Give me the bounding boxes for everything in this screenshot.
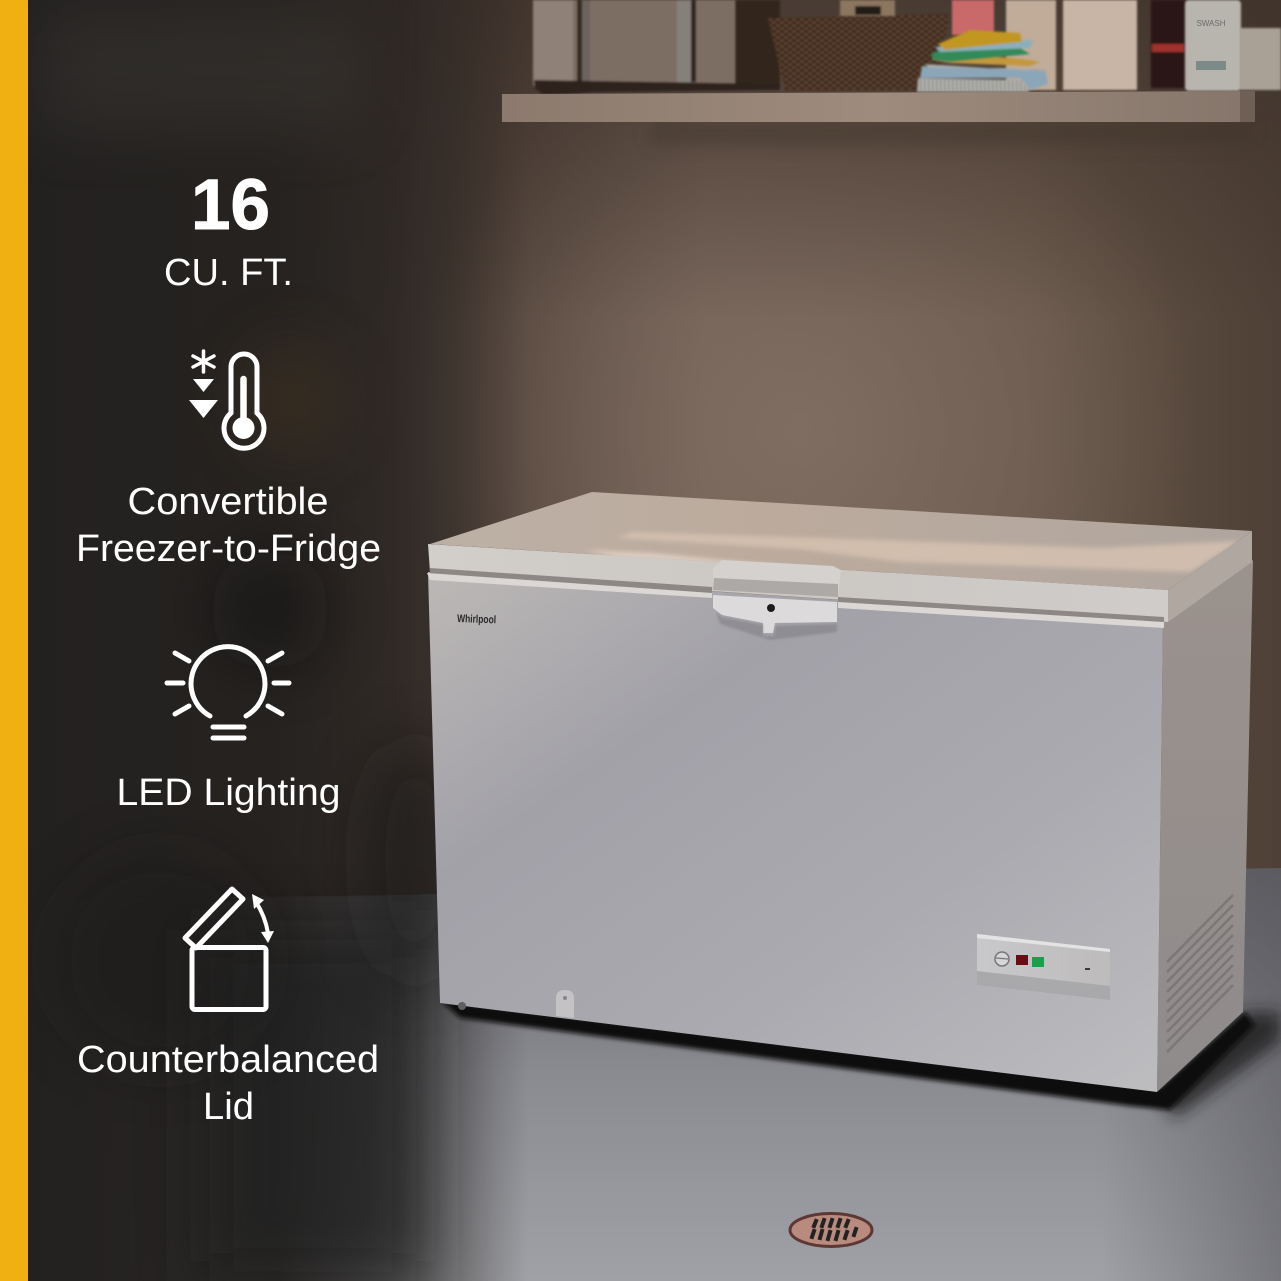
floor shadow under freezer (440, 1000, 1281, 1118)
icon: counterbalanced lid box (185, 889, 274, 1010)
control panel (977, 934, 1110, 1000)
side vent grille (1167, 895, 1233, 1052)
capacity callout (164, 166, 293, 294)
detergent bottle: SWASH (1196, 19, 1226, 28)
label: convertible freezer-to-fridge: Convertible (128, 481, 328, 523)
detergent bottle (1185, 0, 1281, 91)
floor drain (790, 1214, 872, 1246)
cola bottle (1151, 0, 1185, 88)
jars and bottle behind basket (840, 0, 994, 35)
wall shelf board (502, 91, 1255, 122)
freezer caster foot (458, 990, 574, 1018)
dark left overlay (28, 0, 528, 1281)
wicker basket (768, 14, 950, 91)
label: convertible freezer-to-fridge: Freezer-to-Fridge (76, 528, 381, 570)
Whirlpool logo: Whirlpool (457, 613, 496, 626)
icon: thermometer with snowflake and down arrows (189, 351, 264, 448)
shelf with household items (502, 0, 1281, 144)
label: counterbalanced lid (77, 1039, 379, 1128)
lid front edge (428, 544, 1168, 622)
capacity callout: CU. FT. (164, 252, 293, 294)
stacked towels (917, 30, 1048, 92)
shelf shadow (650, 122, 1250, 144)
lid handle (713, 560, 841, 640)
tote bag (533, 0, 780, 97)
paper towel rolls (1006, 0, 1137, 90)
lid highlight (583, 532, 1240, 572)
lid right edge (1168, 531, 1252, 622)
freezer right side (1157, 560, 1253, 1092)
label: convertible freezer-to-fridge (76, 481, 381, 570)
lid top surface (430, 492, 1252, 590)
icon: LED light bulb (167, 647, 289, 738)
label: counterbalanced lid: Counterbalanced (77, 1039, 379, 1081)
lid seam (430, 568, 712, 593)
label: LED lighting: LED Lighting (116, 772, 340, 814)
capacity callout: 16 (191, 166, 270, 245)
chest freezer (427, 492, 1281, 1118)
label: counterbalanced lid: Lid (203, 1086, 254, 1128)
yellow side bar (0, 0, 28, 1281)
freezer front body (428, 572, 1163, 1092)
